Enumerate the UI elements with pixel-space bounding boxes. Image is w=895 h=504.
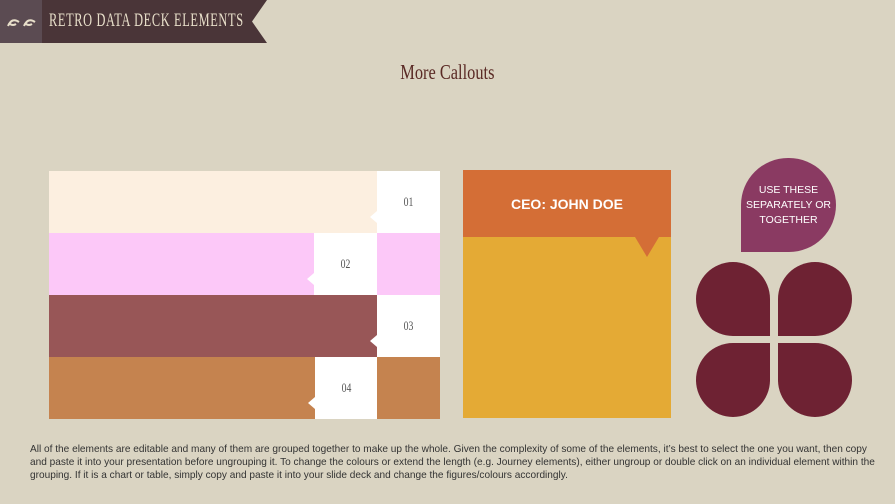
panel: numbered bars: [49, 171, 440, 419]
footer text: All of the elements are editable and many of them are grouped together to make up the whole. Given the complexity of some of the elements, it’s best to select the one you want, then copy and paste it into your presentation before ungrouping it. To change the colours or extend the length (e.g. Journey elements), either ungroup or double click on an individual element within the grouping. If it is a chart or table, simply copy and paste it into your slide deck and change the figures/colours accordingly.: [30, 444, 875, 481]
header title: RETRO DATA DECK ELEMENTS: [49, 10, 244, 31]
label 04: 04: [341, 380, 351, 395]
callout: teardrop: USE THESE: [759, 184, 818, 196]
bar 03: [49, 295, 440, 357]
label 04: [315, 357, 377, 419]
callout header: [463, 170, 671, 237]
clover shapes: [696, 262, 852, 417]
bar 04: [49, 357, 440, 419]
bar 02: [49, 233, 440, 295]
panel: CEO card: [463, 170, 671, 418]
callout header: CEO: JOHN DOE: [511, 196, 623, 212]
label 03: 03: [404, 318, 413, 333]
callout: teardrop: SEPARATELY OR: [746, 198, 831, 210]
header banner: [0, 0, 267, 43]
pointer: [635, 237, 659, 257]
callout: teardrop: [741, 158, 836, 252]
label 02: 02: [341, 256, 350, 271]
label 01: [377, 171, 440, 233]
label 02: [314, 233, 377, 295]
bar 01: [49, 171, 440, 233]
label 03: [377, 295, 440, 357]
label 01: 01: [404, 194, 413, 209]
title: More Callouts: [400, 60, 495, 84]
callout: teardrop: TOGETHER: [759, 214, 818, 226]
